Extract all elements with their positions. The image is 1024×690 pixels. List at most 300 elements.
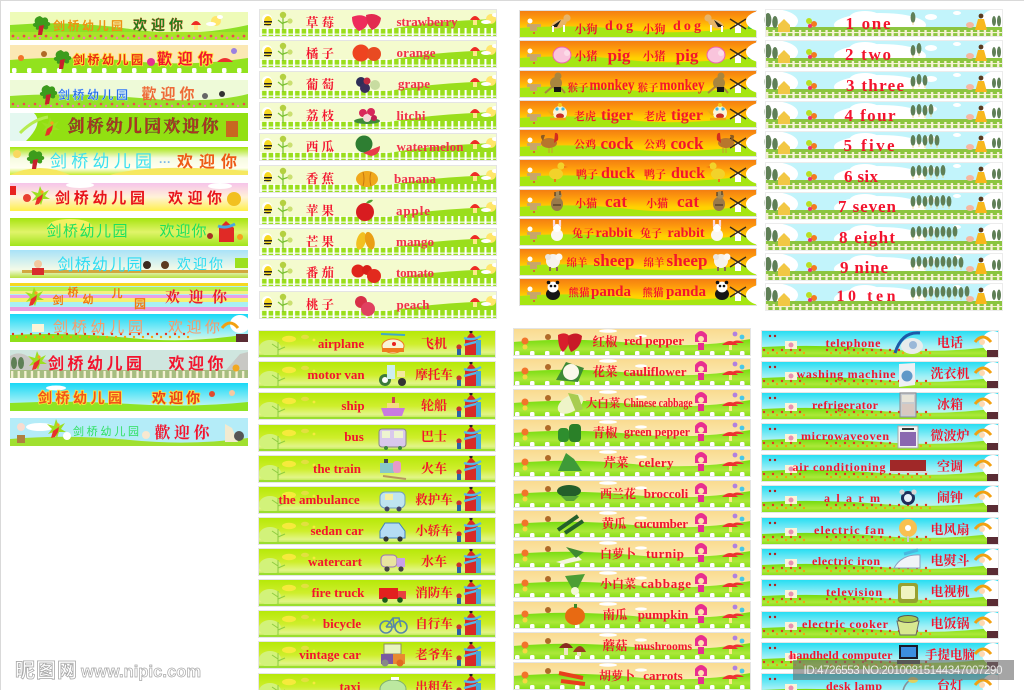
welcome banner 3: 剑桥幼儿园 (58, 87, 128, 102)
appliance: handheld computer (761, 642, 1004, 670)
icon: cucumber (558, 516, 583, 533)
trees: 8 (911, 226, 957, 240)
fruit: peach: peach (396, 297, 430, 312)
number 7 seven (746, 192, 1013, 220)
animal: pig: pig (676, 46, 699, 65)
icon: strawberry (352, 14, 381, 31)
number 9 nine (746, 253, 1013, 281)
animal: cock: 公鸡 (574, 137, 596, 151)
icon: refrigerator (900, 393, 916, 417)
animal: panda: 熊猫 (568, 286, 590, 299)
transport: sedan car: 小轿车 (415, 523, 453, 538)
number 4 four (746, 101, 1013, 129)
vegetable: pumpkin: pumpkin (638, 607, 689, 622)
transport: the ambulance: the ambulance (278, 492, 360, 507)
transport: vintage car (258, 641, 496, 669)
number 5 five (746, 131, 1013, 159)
transport: fire truck: 消防车 (415, 585, 453, 600)
welcome banner 5: 欢迎你 (177, 153, 237, 171)
number 3 three: 3 three (846, 76, 904, 95)
animal: panda: panda (591, 284, 632, 300)
icon: sheep (545, 254, 562, 271)
vegetable: red pepper: 红椒 (592, 334, 618, 349)
appliance: electric iron: 电熨斗 (930, 553, 970, 568)
number 2 two: 2 two (845, 45, 891, 64)
icon: bicycle (380, 618, 407, 633)
number 7 seven: 7 seven (838, 197, 897, 216)
fruit: grape: grape (398, 76, 430, 91)
fruit: watermelon: 西 瓜 (306, 139, 335, 154)
appliance: refrigerator: 冰箱 (937, 397, 963, 412)
fruit: tomato (259, 259, 498, 287)
animal: sheep: 绵羊 (566, 256, 588, 269)
icon: ship (381, 397, 405, 416)
icon: television (898, 583, 918, 603)
icon: monkey (545, 72, 565, 93)
vegetable: Chinese cabbage (513, 389, 751, 418)
icon: banana (356, 171, 378, 187)
welcome banner 6 (10, 182, 248, 211)
animal: pig: 小猪 (574, 49, 598, 63)
trees: 1 (911, 12, 915, 25)
icon: tomato (352, 264, 381, 283)
vegetable: cabbage: cabbage (641, 576, 691, 591)
fruit: strawberry: 草 莓 (306, 15, 335, 30)
animal: rabbit (519, 218, 757, 246)
fruit: litchi: litchi (396, 108, 426, 123)
icon: fire truck (379, 588, 406, 603)
transport: bus: 巴士 (421, 429, 447, 444)
fruit: apple: apple (396, 203, 430, 218)
vegetable: turnip: 白萝卜 (600, 546, 637, 561)
trees: 2 (911, 43, 921, 58)
animal: tiger: tiger (601, 107, 633, 124)
vegetable: celery: celery (638, 455, 674, 470)
icon: green pepper (558, 424, 581, 442)
icon: pig (553, 47, 571, 63)
icon: desk lamp (903, 677, 918, 690)
welcome banner 12: 欢迎你 (152, 390, 200, 406)
vegetable: mushrooms: mushrooms (634, 639, 692, 653)
number 9 nine: 9 nine (840, 258, 888, 277)
icon: grape (356, 77, 380, 93)
animal: pig: pig (608, 46, 631, 65)
welcome banner 13: 歡迎你 (154, 423, 211, 442)
vegetable: broccoli: broccoli (644, 486, 689, 501)
number 10 ten: 10 ten (836, 288, 896, 305)
number 8 eight (746, 223, 1013, 251)
transport: vintage car: vintage car (299, 647, 361, 662)
animal: cock: 公鸡 (644, 137, 666, 151)
appliance: electric cooker (761, 611, 1004, 639)
animal: duck (519, 159, 757, 187)
animal: tiger: 老虎 (644, 109, 666, 123)
appliance: microwave oven: 微波炉 (930, 428, 970, 443)
number 10 ten (746, 283, 1013, 311)
welcome banner 5 (10, 147, 248, 175)
animal: duck: 鸭子 (644, 167, 666, 181)
icon: motorcycle (379, 365, 406, 386)
animal: cock: cock (670, 134, 704, 153)
animal: duck: 鸭子 (576, 167, 598, 181)
welcome banner 10: 欢迎你 (168, 319, 220, 336)
appliance: handheld computer: 手提电脑 (925, 647, 975, 662)
welcome banner 9: 桥 (68, 285, 78, 299)
welcome banner 4: 剑桥幼儿园欢迎你 (68, 116, 220, 136)
icon: apple (356, 200, 374, 221)
transport: airplane (258, 330, 496, 358)
vegetable: cucumber (513, 510, 751, 538)
welcome banner 9: 欢迎你 (165, 288, 229, 306)
animal: cat: 小猫 (575, 196, 597, 210)
animal: dog: dog (673, 19, 701, 34)
vegetable: cauliflower (513, 358, 751, 386)
animal: cat (519, 189, 757, 217)
vegetable: cabbage: 小白菜 (600, 576, 636, 591)
appliance: handheld computer: handheld computer (790, 648, 893, 662)
animal: sheep: sheep (594, 251, 634, 270)
appliance: electric fan (761, 517, 1004, 545)
welcome banner 2: 剑桥幼儿园 (73, 52, 143, 67)
animal: rabbit: rabbit (668, 226, 705, 241)
icon: train (380, 459, 406, 479)
transport: the ambulance: 救护车 (415, 492, 453, 507)
vegetable: cabbage (513, 570, 751, 598)
vegetable: red pepper (513, 328, 751, 356)
icon: car (380, 523, 405, 542)
appliance: alarm: alarm (824, 491, 880, 505)
animal: panda (519, 278, 757, 306)
vegetable: green pepper (513, 419, 751, 447)
number 4 four: 4 four (844, 106, 896, 125)
vegetable: carrots: 胡萝卜 (599, 668, 636, 683)
trees: 9 (911, 256, 963, 270)
appliance: refrigerator: refrigerator (812, 398, 879, 412)
trees: 7 (911, 195, 951, 209)
transport: ship: 轮船 (421, 398, 447, 413)
vegetable: green pepper: 青椒 (592, 425, 618, 440)
animal: pig: 小猪 (642, 49, 666, 63)
vegetable: cauliflower: cauliflower (624, 364, 687, 379)
appliance: telephone: telephone (826, 336, 881, 350)
vegetable: pumpkin (513, 601, 751, 629)
transport: fire truck (258, 579, 496, 607)
welcome banner 7 (10, 218, 248, 246)
vegetable: cucumber: 黄瓜 (601, 516, 627, 531)
transport: taxi (258, 673, 496, 690)
appliance: air conditioning (761, 454, 1004, 482)
icon: air conditioner (890, 460, 928, 473)
appliance: alarm: 闹钟 (937, 490, 963, 505)
animal: monkey: 猴子 (568, 81, 589, 94)
animal: tiger: tiger (671, 107, 703, 124)
transport: the train: 火车 (421, 461, 447, 476)
fruit: litchi (259, 102, 498, 130)
fruit: mango: mango (396, 234, 434, 249)
welcome banner 11 (10, 350, 248, 378)
appliance: microwave oven: microwaveoven (801, 429, 889, 443)
animal: monkey (519, 70, 757, 98)
icon: pumpkin (565, 604, 585, 625)
vegetable: carrots: carrots (643, 668, 683, 683)
transport: bus: bus (344, 429, 364, 444)
animal: duck: duck (671, 165, 705, 182)
transport: sedan car (258, 517, 496, 545)
welcome banner 13: 剑桥幼儿园 (73, 424, 139, 438)
icon: rabbit (551, 220, 563, 241)
transport: vintage car: 老爷车 (415, 647, 453, 662)
animal: dog: 小狗 (574, 22, 598, 36)
vegetable: celery (513, 449, 751, 477)
appliance: washing machine: 洗衣机 (930, 366, 970, 381)
fruit: peach (259, 291, 498, 319)
appliance: television (761, 579, 1004, 607)
vegetable: turnip (513, 540, 751, 568)
welcome banner 1 (10, 12, 248, 40)
transport: watercart: watercart (308, 554, 363, 569)
welcome banner 8: 欢迎你 (177, 256, 223, 272)
animal: sheep: 绵羊 (644, 256, 665, 269)
icon: taxi (380, 677, 406, 690)
animal: cat: cat (677, 192, 699, 211)
icon: broccoli (557, 485, 581, 501)
icon: vintage car (381, 644, 405, 666)
animal: panda: 熊猫 (642, 286, 664, 299)
icon: iron (894, 550, 920, 568)
watermark: nipic logo (15, 660, 201, 682)
number 1 one: 1 one (846, 14, 891, 33)
welcome banner 6: 剑桥幼儿园 (55, 189, 145, 207)
animal: cock (519, 129, 757, 157)
icon: litchi (354, 108, 380, 124)
appliance: electric cooker: electric cooker (802, 617, 889, 631)
vegetable: cucumber: cucumber (634, 516, 688, 531)
icon: ambulance (380, 492, 405, 512)
fruit: banana: banana (394, 171, 436, 186)
welcome banner 8: 剑桥幼儿园 (58, 256, 142, 274)
number 6 six (746, 162, 1013, 190)
number 5 five: 5 five (844, 136, 895, 155)
trees: 3 (911, 74, 927, 89)
icon: tiger (548, 103, 567, 120)
vegetable: mushrooms (513, 632, 751, 660)
transport: motor van (258, 361, 496, 389)
welcome banner 9: 儿 (112, 287, 122, 300)
animal: tiger: 老虎 (574, 109, 596, 123)
icon: alarm clock (899, 489, 917, 505)
welcome banner 5: 剑桥幼儿园 (50, 152, 152, 171)
transport: the train: the train (313, 461, 362, 476)
watermark: image id bar (793, 660, 1014, 680)
animal: tiger (519, 100, 757, 128)
icon: mango (354, 231, 377, 251)
fruit: peach: 桃 子 (306, 297, 335, 312)
vegetable: turnip: turnip (646, 546, 684, 561)
icon: turnip (556, 547, 584, 564)
fruit: orange: 橘 子 (306, 46, 335, 61)
vegetable: Chinese cabbage: 大白菜 (586, 396, 621, 410)
welcome banner 11: 剑桥幼儿园 (48, 354, 142, 373)
fruit: strawberry: strawberry (396, 14, 458, 29)
vegetable: red pepper: red pepper (624, 333, 684, 348)
icon: helicopter (381, 334, 405, 353)
appliance: desk lamp (761, 673, 1004, 690)
fruit: grape (259, 71, 498, 99)
fruit: watermelon: watermelon (396, 139, 464, 154)
watermark: image id bar: ID:4726553 NO:20100815144347007290 (804, 665, 1002, 677)
animal: sheep (519, 248, 757, 276)
transport: airplane: 飞机 (421, 336, 447, 351)
icon: laptop (897, 645, 920, 664)
transport: sedan car: sedan car (310, 523, 364, 538)
trees: 6 (911, 165, 945, 179)
appliance: television: 电视机 (930, 584, 970, 599)
fruit: watermelon (259, 133, 498, 161)
welcome banner 8 (10, 250, 248, 278)
icon: peach (355, 296, 375, 316)
appliance: alarm (761, 485, 1004, 513)
icon: celery (558, 453, 582, 471)
icon: duck (549, 162, 568, 182)
fruit: banana (259, 165, 498, 193)
transport: ship (258, 392, 496, 420)
fruit: apple: 苹 果 (306, 203, 335, 218)
icon: Chinese cabbage (554, 390, 587, 418)
appliance: microwave oven (761, 423, 1004, 451)
icon: cat (551, 191, 563, 211)
transport: motor van: motor van (307, 367, 365, 382)
appliance: washing machine (761, 361, 1004, 389)
icon: red pepper (558, 333, 582, 352)
welcome banner 13 (10, 418, 248, 446)
fruit: orange (259, 40, 498, 68)
welcome banner 7: 剑桥幼儿园 (46, 223, 128, 240)
welcome banner 1: 欢迎你 (133, 17, 183, 33)
welcome banner 2: 歡迎你 (157, 51, 213, 68)
vegetable: broccoli: 西兰花 (600, 486, 636, 501)
animal: dog (519, 10, 757, 38)
animal: dog: dog (605, 19, 633, 34)
icon: cauliflower (556, 362, 584, 382)
trees: 10 (911, 286, 969, 300)
welcome banner 9 (10, 283, 248, 311)
appliance: air conditioning: air conditioning (792, 460, 886, 474)
transport: ship: ship (341, 398, 365, 413)
icon: water truck (381, 555, 405, 572)
transport: bus (258, 424, 496, 452)
welcome banner 1: 剑桥幼儿园 (53, 18, 123, 33)
transport: watercart (258, 548, 496, 576)
fruit: litchi: 荔 枝 (306, 108, 335, 123)
vegetable: cauliflower: 花菜 (592, 364, 618, 379)
fruit: mango: 芒 果 (306, 234, 335, 249)
transport: fire truck: fire truck (312, 585, 365, 600)
icon: fan (899, 519, 917, 542)
icon: panda (546, 281, 560, 300)
number 8 eight: 8 eight (839, 228, 895, 247)
fruit: strawberry (259, 9, 498, 37)
appliance: electric iron: electric iron (812, 554, 880, 568)
welcome banner 12: 剑桥幼儿园 (38, 390, 122, 406)
icon: mushrooms (559, 643, 586, 656)
fruit: tomato: tomato (396, 265, 434, 280)
animal: rabbit: rabbit (596, 226, 633, 241)
appliance: air conditioning: 空调 (937, 459, 963, 474)
animal: monkey: monkey (590, 77, 634, 94)
icon: watermelon (356, 136, 380, 156)
fruit: tomato: 番 茄 (306, 265, 335, 280)
animal: sheep: sheep (666, 251, 708, 270)
transport: airplane: airplane (318, 336, 364, 351)
welcome banner 2 (10, 45, 248, 73)
animal: duck: duck (601, 165, 635, 182)
fruit: orange: orange (396, 45, 436, 60)
vegetable: Chinese cabbage: Chinese cabbage (624, 395, 693, 410)
icon: dog (550, 14, 571, 32)
appliance: television: television (826, 585, 882, 599)
icon: microwave (898, 426, 918, 448)
welcome banner 6: 欢迎你 (168, 190, 222, 207)
animal: cat: cat (605, 192, 627, 211)
icon: bok choy (565, 574, 585, 595)
welcome banner 10: 剑桥幼儿园 (53, 319, 143, 336)
welcome banner 9: 剑 (52, 293, 64, 307)
animal: monkey: 猴子 (638, 81, 659, 94)
icon: rice cooker (897, 616, 919, 635)
welcome banner 9: 园 (134, 297, 146, 311)
transport: watercart: 水车 (421, 554, 447, 569)
welcome banner 9: 幼 (82, 292, 94, 306)
icon: carrots (559, 673, 585, 684)
transport: bicycle: bicycle (323, 616, 361, 631)
icon: washing machine (899, 363, 915, 387)
number 3 three (746, 71, 1013, 99)
animal: rabbit: 兔子 (572, 226, 594, 240)
appliance: electric fan: electric fan (814, 523, 884, 537)
appliance: electric fan: 电风扇 (930, 522, 970, 537)
watermark: nipic logo: 昵图网 (15, 660, 77, 682)
animal: monkey: monkey (660, 77, 704, 94)
icon: telephone (895, 333, 923, 354)
fruit: banana: 香 蕉 (306, 171, 336, 186)
vegetable: carrots (513, 662, 751, 690)
welcome banner 10 (10, 314, 250, 342)
watermark: nipic logo: www.nipic.com (80, 663, 201, 681)
transport: the train (258, 455, 496, 483)
fruit: apple (259, 197, 498, 225)
welcome banner 7: 欢迎你 (160, 223, 206, 240)
animal: panda: panda (666, 284, 706, 300)
welcome banner 3 (10, 80, 248, 108)
animal: cat: 小猫 (646, 196, 668, 210)
welcome banner 4 (10, 113, 248, 141)
welcome banner 5: ··· (159, 155, 171, 169)
trees: 5 (911, 134, 939, 148)
trees: 4 (911, 104, 933, 118)
number 1 one (746, 9, 1013, 37)
appliance: washing machine: washing machine (796, 367, 896, 381)
welcome banner 11: 欢迎你 (168, 355, 224, 373)
transport: bicycle: 自行车 (415, 616, 453, 631)
icon: orange (352, 44, 381, 62)
transport: bicycle (258, 610, 496, 638)
transport: motor van: 摩托车 (415, 367, 453, 382)
appliance: telephone (761, 330, 1004, 358)
number 2 two (746, 40, 1013, 68)
vegetable: pumpkin: 南瓜 (602, 607, 628, 622)
vegetable: celery: 芹菜 (603, 455, 629, 470)
fruit: grape: 葡 萄 (306, 77, 335, 92)
